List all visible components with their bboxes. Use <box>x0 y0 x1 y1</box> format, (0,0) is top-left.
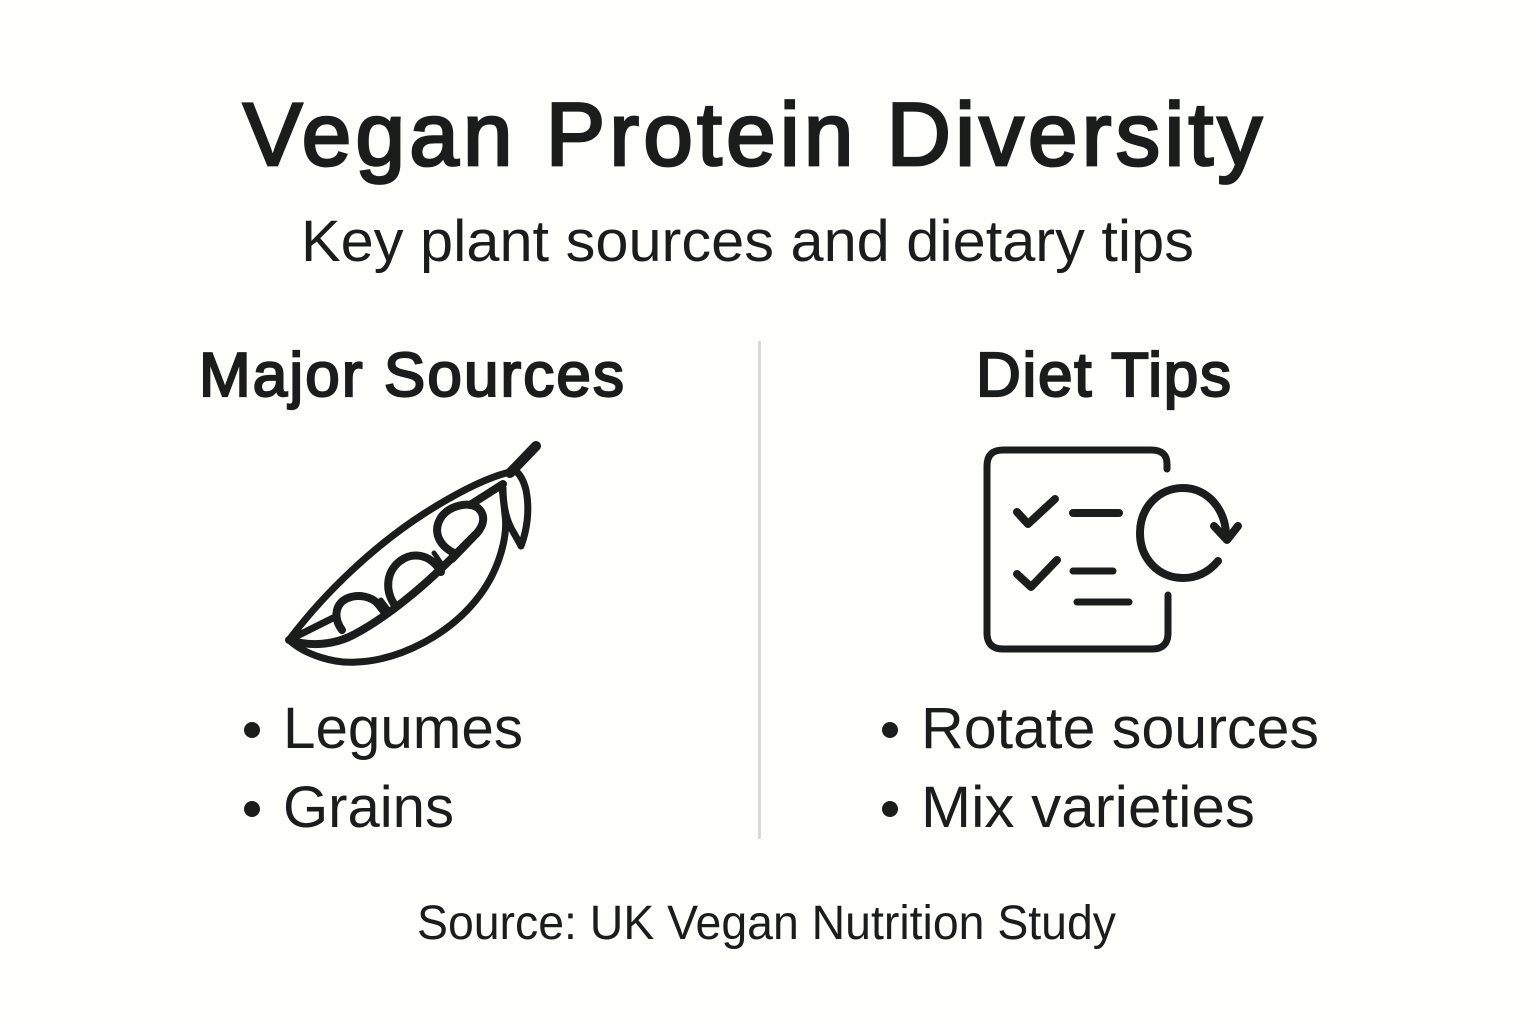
source note: Source: UK Vegan Nutrition Study <box>417 897 1116 950</box>
list: major sources: Legumes <box>283 696 523 761</box>
title: Vegan Protein Diversity <box>243 84 1262 184</box>
list: major sources <box>244 696 523 840</box>
icon: pea pod <box>289 446 536 662</box>
panel: diet tips <box>882 341 1319 840</box>
heading: diet tips: Diet Tips <box>976 341 1231 410</box>
heading: major sources: Major Sources <box>199 341 624 410</box>
subtitle: Key plant sources and dietary tips <box>301 209 1194 274</box>
list: major sources: Grains <box>283 775 454 840</box>
icon: checklist with rotate arrow <box>987 450 1238 649</box>
panel: major sources <box>199 341 624 840</box>
list: diet tips: Mix varieties <box>921 775 1255 840</box>
list: diet tips <box>882 696 1319 840</box>
list: diet tips: Rotate sources <box>921 696 1319 761</box>
